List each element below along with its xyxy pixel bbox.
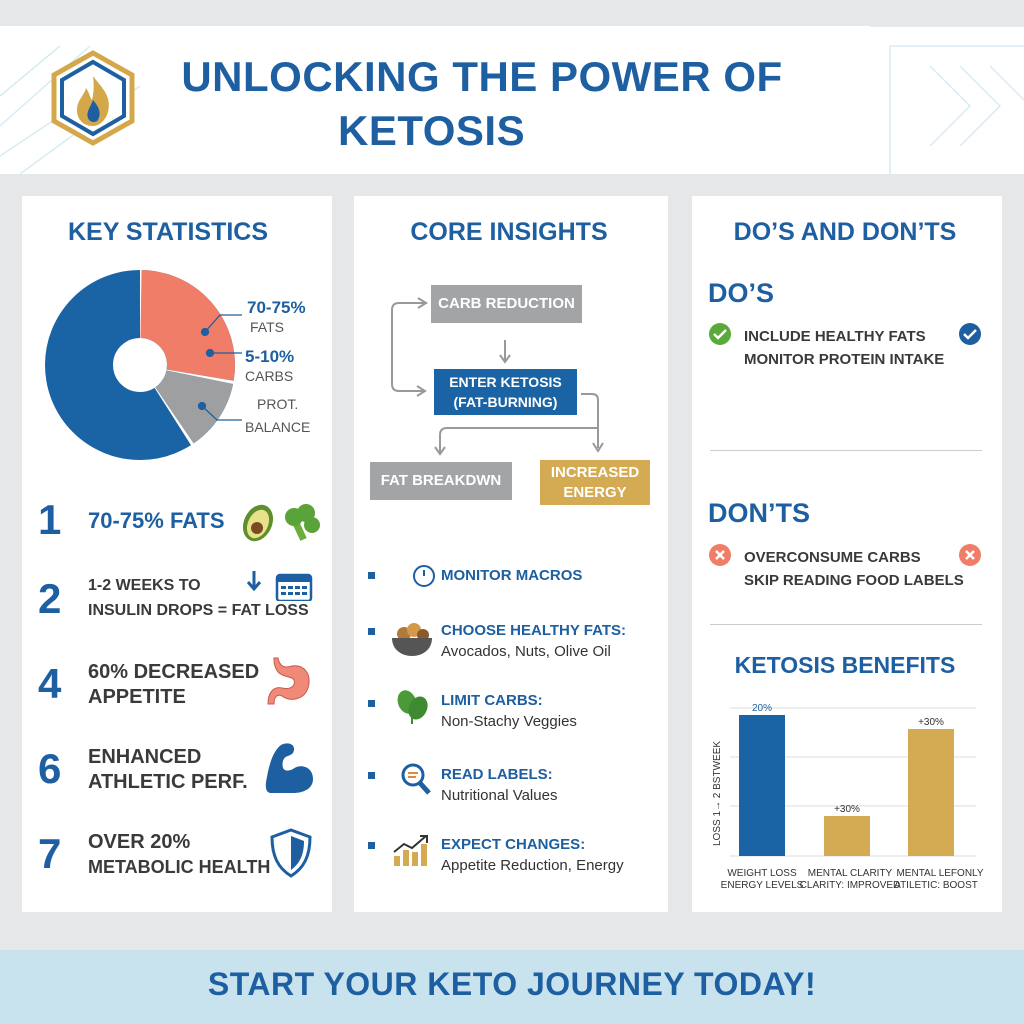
stat 7: 7 bbox=[38, 830, 61, 877]
icon: magnifier bbox=[402, 764, 431, 795]
footer banner: START YOUR KETO JOURNEY TODAY! bbox=[208, 966, 816, 1002]
chart: macro donut bbox=[45, 270, 310, 460]
list: monitor macros: MONITOR MACROS bbox=[441, 567, 582, 584]
chart: macro donut: PROT. bbox=[257, 396, 298, 412]
icon: avocado broccoli bbox=[243, 504, 320, 542]
heading: core insights: CORE INSIGHTS bbox=[410, 218, 608, 246]
panel: dos and donts bbox=[692, 196, 1002, 912]
list: limit carbs bbox=[368, 690, 577, 730]
heading: ketosis benefits: KETOSIS BENEFITS bbox=[735, 652, 955, 678]
stat 2: INSULIN DROPS = FAT LOSS bbox=[88, 602, 309, 619]
bar chart: benefits: ENERGY LEVELS bbox=[721, 880, 804, 891]
stat 7: OVER 20% bbox=[88, 831, 190, 853]
box: enter ketosis: (FAT-BURNING) bbox=[454, 394, 557, 410]
list: healthy fats: CHOOSE HEALTHY FATS: bbox=[441, 622, 626, 639]
box: increased energy bbox=[540, 460, 650, 505]
icon: spinach bbox=[398, 690, 428, 724]
stat 6: 6 bbox=[38, 745, 61, 792]
list: expect changes: EXPECT CHANGES: bbox=[441, 836, 585, 853]
stat 2: 1-2 WEEKS TO bbox=[88, 577, 201, 594]
icon: flame hexagon logo bbox=[52, 50, 134, 146]
bar chart: benefits: ATILETIC: BOOST bbox=[894, 880, 978, 891]
chart: macro donut: 70-75% bbox=[247, 298, 306, 317]
bar chart: benefits: 20% bbox=[752, 703, 772, 714]
list: monitor macros bbox=[368, 565, 582, 587]
list: limit carbs: Non-Stachy Veggies bbox=[441, 713, 577, 730]
heading: key statistics: KEY STATISTICS bbox=[68, 218, 268, 246]
stat 7: METABOLIC HEALTH bbox=[88, 857, 270, 877]
title: UNLOCKING THE POWER OF bbox=[181, 53, 783, 100]
stat 4: 4 bbox=[38, 660, 61, 707]
stat 7 bbox=[38, 828, 312, 878]
bar chart: benefits: +30% bbox=[834, 804, 860, 815]
bar chart: benefits: MENTAL CLARITY bbox=[808, 868, 893, 879]
list: dos bbox=[709, 323, 981, 368]
icon: nut bowl bbox=[392, 623, 432, 656]
list: dos: INCLUDE HEALTHY FATS bbox=[744, 328, 926, 345]
box: increased energy: ENERGY bbox=[563, 484, 627, 501]
icon: down arrow calendar bbox=[246, 571, 312, 601]
list: expect changes bbox=[368, 835, 624, 874]
stat 6: ENHANCED bbox=[88, 746, 201, 768]
box: fat breakdown bbox=[370, 462, 512, 500]
bar chart: benefits: CLARITY: IMPROVED bbox=[800, 880, 900, 891]
list: donts bbox=[709, 544, 981, 589]
box: enter ketosis bbox=[434, 369, 577, 415]
stat 4 bbox=[38, 658, 310, 708]
footer banner bbox=[0, 950, 1024, 1024]
list: read labels bbox=[368, 764, 557, 804]
stat 1 bbox=[38, 496, 320, 543]
stat 1: 70-75% FATS bbox=[88, 508, 225, 533]
chart: macro donut: CARBS bbox=[245, 368, 293, 384]
list: read labels: READ LABELS: bbox=[441, 766, 553, 783]
title: KETOSIS bbox=[338, 107, 525, 154]
stat 6 bbox=[38, 743, 313, 793]
stat 4: 60% DECREASED bbox=[88, 661, 259, 683]
stat 1: 1 bbox=[38, 496, 61, 543]
box: enter ketosis: ENTER KETOSIS bbox=[449, 374, 562, 390]
stat 2: 2 bbox=[38, 575, 61, 622]
bar chart: benefits: LOSS 1→ 2 BSTWEEK bbox=[712, 741, 723, 846]
panel: key statistics bbox=[22, 196, 332, 912]
icon: clock bbox=[413, 565, 435, 587]
chart: macro donut: 5-10% bbox=[245, 347, 294, 366]
list: donts: SKIP READING FOOD LABELS bbox=[744, 572, 964, 589]
subheading: dos: DO’S bbox=[708, 278, 774, 308]
stat 2 bbox=[38, 571, 312, 622]
box: fat breakdown: FAT BREAKDWN bbox=[381, 472, 501, 489]
list: donts: OVERCONSUME CARBS bbox=[744, 549, 921, 566]
bar chart: benefits: WEIGHT LOSS bbox=[727, 868, 797, 879]
chart: macro donut: FATS bbox=[250, 319, 284, 335]
list: healthy fats bbox=[368, 622, 626, 660]
panel: core insights bbox=[354, 196, 668, 912]
chart: macro donut: BALANCE bbox=[245, 419, 310, 435]
list: limit carbs: LIMIT CARBS: bbox=[441, 692, 543, 709]
box: carb reduction bbox=[431, 285, 582, 323]
icon: stomach bbox=[268, 658, 310, 704]
box: carb reduction: CARB REDUCTION bbox=[438, 295, 575, 312]
list: dos: MONITOR PROTEIN INTAKE bbox=[744, 351, 944, 368]
list: read labels: Nutritional Values bbox=[441, 787, 557, 804]
bar chart: benefits: +30% bbox=[918, 717, 944, 728]
bar chart: benefits bbox=[712, 703, 984, 891]
header band bbox=[0, 26, 1024, 174]
stat 4: APPETITE bbox=[88, 686, 186, 708]
icon: shield bbox=[270, 828, 312, 878]
icon: chart up bbox=[393, 835, 428, 866]
list: healthy fats: Avocados, Nuts, Olive Oil bbox=[441, 643, 611, 660]
subheading: donts: DON’TS bbox=[708, 498, 810, 528]
box: increased energy: INCREASED bbox=[551, 464, 639, 481]
stat 6: ATHLETIC PERF. bbox=[88, 771, 248, 793]
flowchart bbox=[370, 285, 650, 505]
heading: dos and donts: DO’S AND DON’TS bbox=[734, 218, 956, 246]
title bbox=[181, 53, 783, 154]
list: expect changes: Appetite Reduction, Energy bbox=[441, 857, 624, 874]
bar chart: benefits: MENTAL LEFONLY bbox=[896, 868, 984, 879]
icon: muscle arm bbox=[266, 743, 313, 793]
